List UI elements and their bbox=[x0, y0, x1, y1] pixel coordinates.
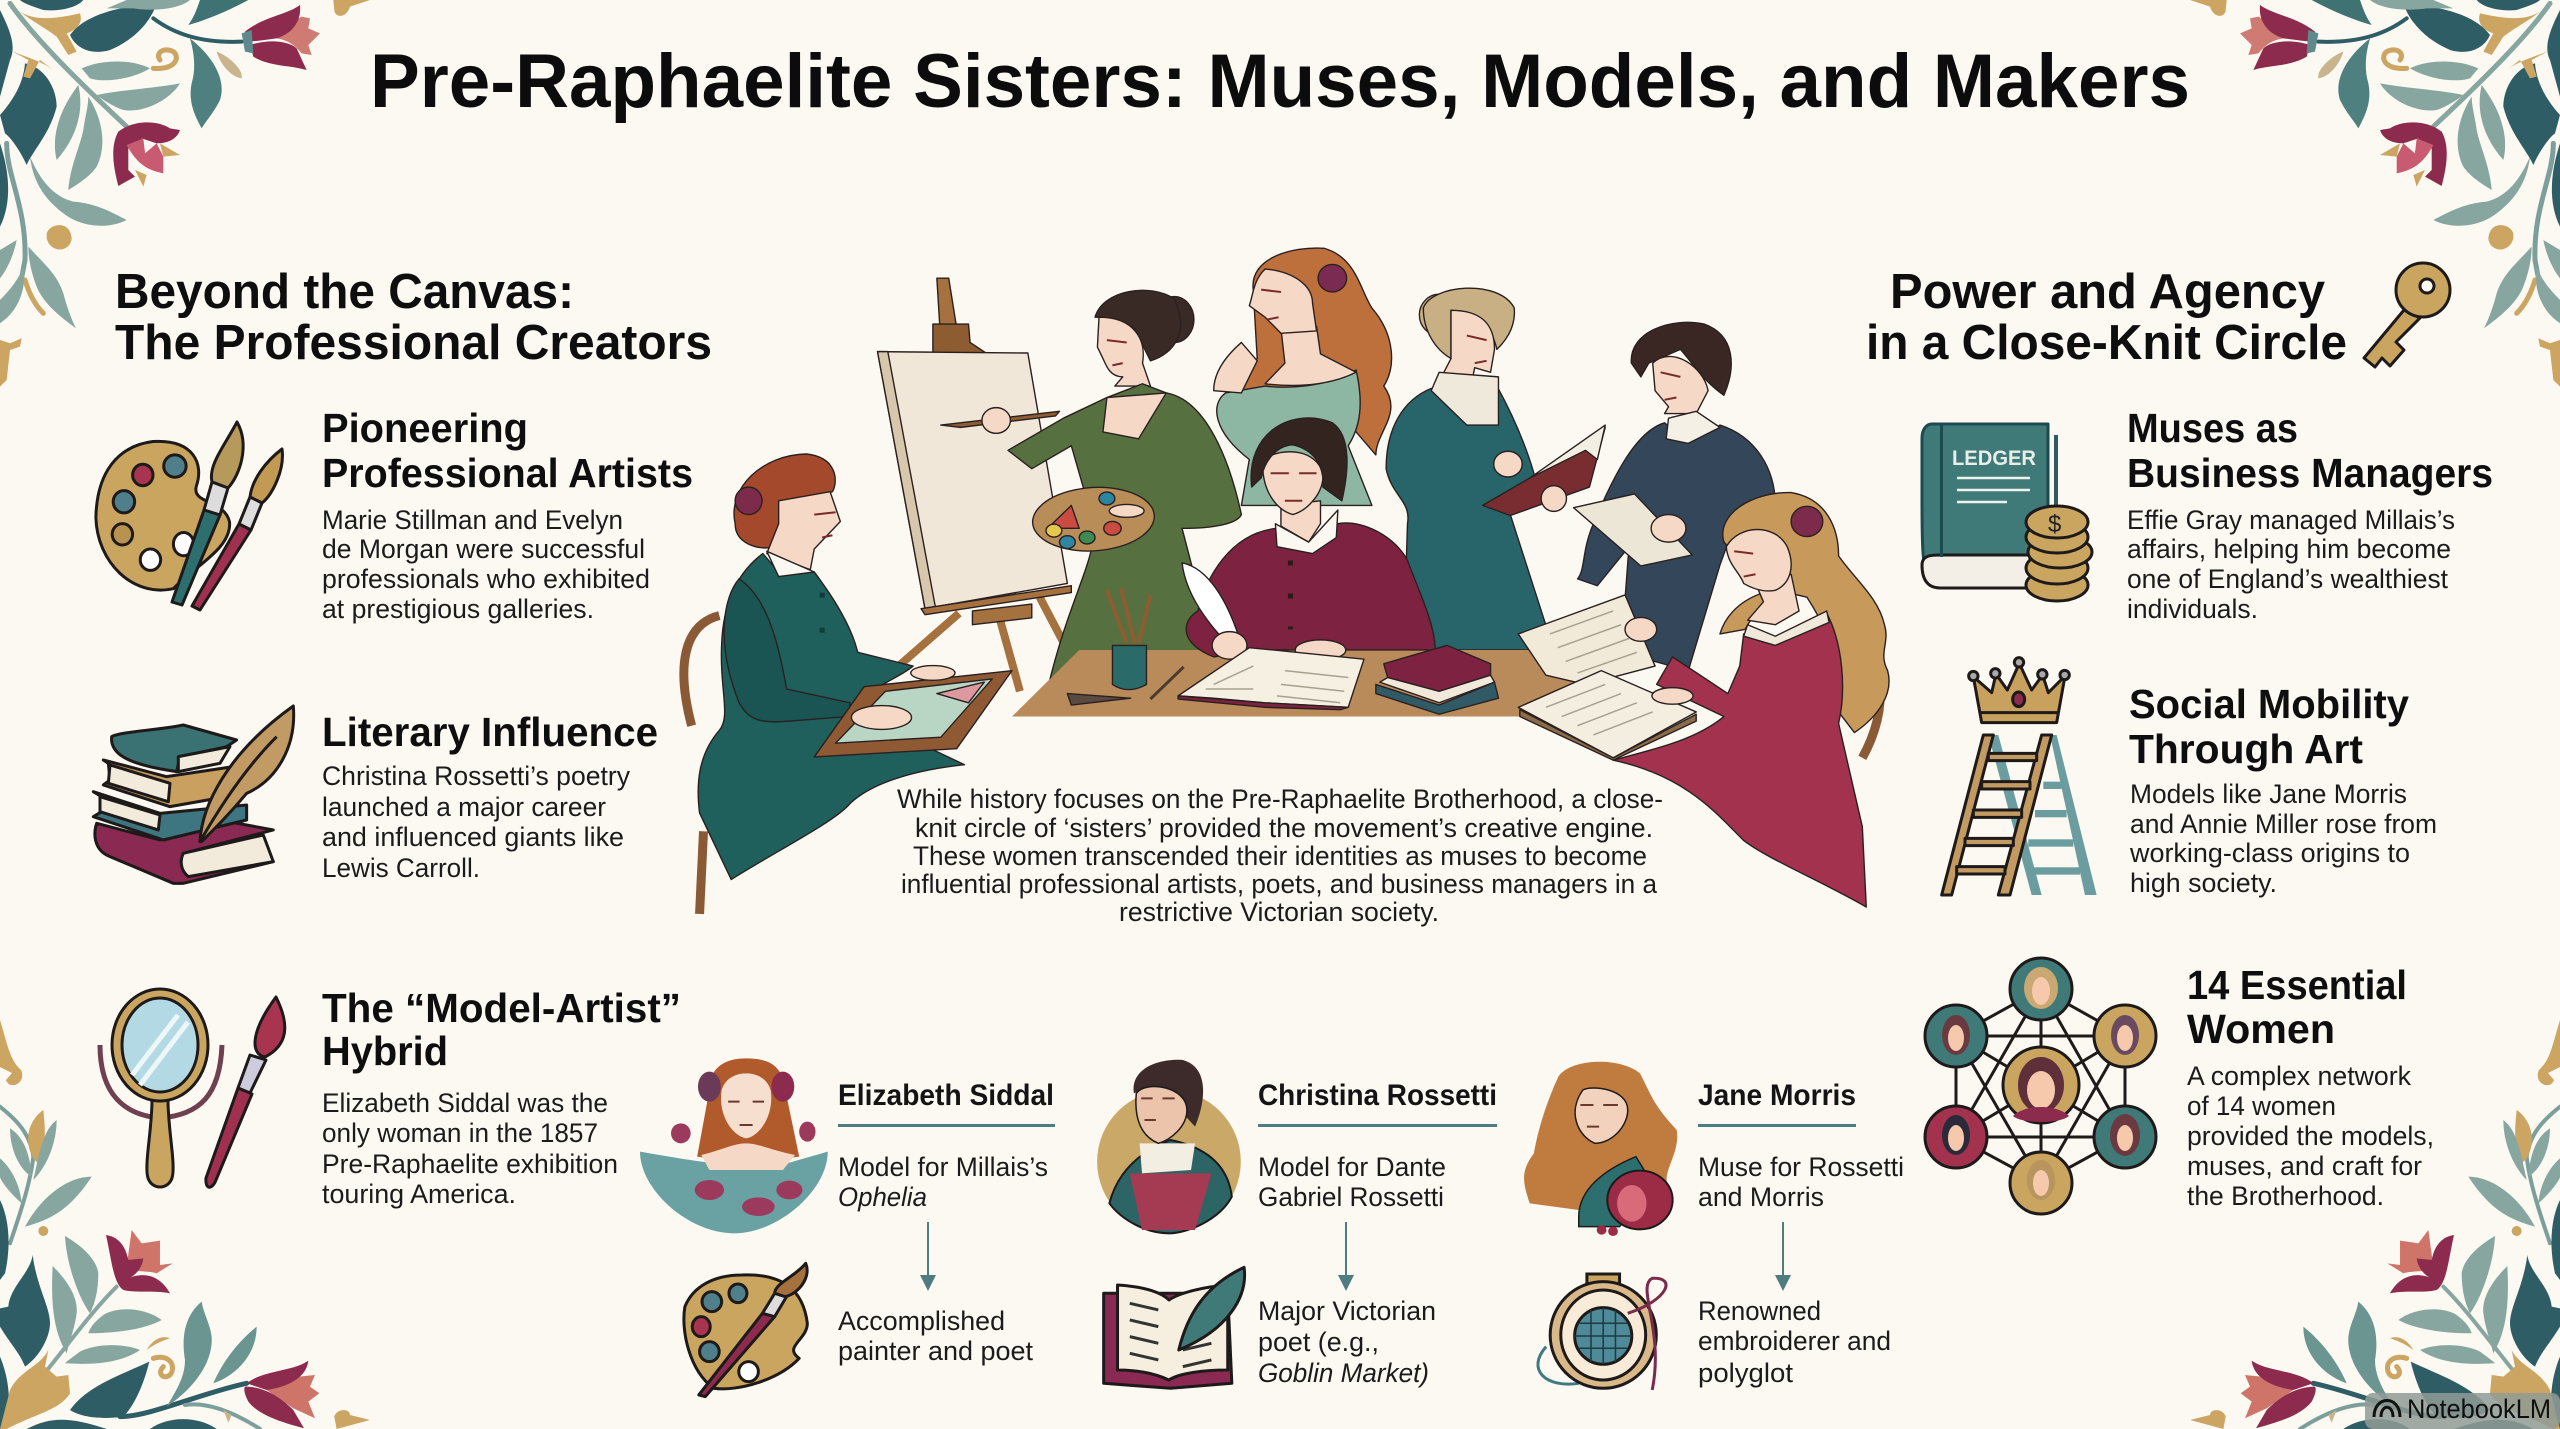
teal ladder behind bbox=[1988, 735, 2097, 895]
arrow: Morris bbox=[1775, 1222, 1791, 1291]
block: The Model-Artist Hybrid: Hybrid bbox=[322, 1028, 448, 1074]
text: Siddal outcome: Accomplished bbox=[838, 1306, 1005, 1336]
intro paragraph: influential professional artists, poets, and business managers in a bbox=[901, 869, 1658, 899]
icon: ledger and coins: LEDGER bbox=[1952, 447, 2036, 470]
text: Christina Rossetti: Christina Rossetti bbox=[1258, 1079, 1497, 1112]
heading: left column: The Professional Creators bbox=[115, 316, 712, 370]
block: Literary Influence bbox=[322, 709, 658, 883]
title: Pre-Raphaelite Sisters: Muses, Models, and Makers bbox=[370, 39, 2190, 124]
block: Social Mobility Through Art: high society. bbox=[2130, 868, 2277, 898]
block: The Model-Artist Hybrid: The “Model-Artist” bbox=[322, 985, 681, 1031]
floral corner: bottom left bbox=[0, 1020, 370, 1429]
heading: right column: in a Close-Knit Circle bbox=[1866, 316, 2347, 370]
text: Rossetti outcome bbox=[1258, 1296, 1436, 1388]
block: Pioneering Professional Artists: de Morgan were successful bbox=[322, 534, 645, 564]
text: Jane Morris: Muse for Rossetti bbox=[1698, 1152, 1904, 1182]
watermark: NotebookLM: NotebookLM bbox=[2407, 1394, 2551, 1424]
table bbox=[1012, 650, 1688, 717]
icon: ledger and coins: $ bbox=[2048, 511, 2061, 538]
block: Pioneering Professional Artists bbox=[322, 405, 693, 624]
woman painting in green dress bbox=[941, 290, 1241, 689]
block: Pioneering Professional Artists: at prestigious galleries. bbox=[322, 594, 594, 624]
text: Rossetti outcome: poet (e.g., bbox=[1258, 1327, 1379, 1357]
back woman with auburn hair and mint dress bbox=[1214, 248, 1392, 505]
arrow: Siddal bbox=[920, 1222, 936, 1291]
block: 14 Essential Women: the Brotherhood. bbox=[2187, 1181, 2384, 1211]
intro paragraph: knit circle of ‘sisters’ provided the movement’s creative engine. bbox=[915, 813, 1653, 843]
block: 14 Essential Women: Women bbox=[2187, 1006, 2335, 1052]
brown ladder and crown bbox=[1942, 658, 2069, 895]
block: 14 Essential Women: 14 Essential bbox=[2187, 962, 2407, 1008]
intro paragraph: restrictive Victorian society. bbox=[1119, 897, 1439, 927]
center woman in burgundy writing with quill bbox=[1182, 418, 1435, 660]
icon: ledger and coins bbox=[1922, 424, 2092, 601]
central illustration: seven women at a table bbox=[684, 248, 1889, 914]
text: Morris outcome: polyglot bbox=[1698, 1358, 1793, 1388]
seated woman right with long blonde hair bbox=[1613, 493, 1889, 907]
block: Literary Influence: Lewis Carroll. bbox=[322, 853, 480, 883]
portrait: Christina Rossetti bbox=[1097, 1060, 1241, 1233]
text: Jane Morris bbox=[1698, 1079, 1904, 1212]
text: Elizabeth Siddal: Ophelia bbox=[838, 1182, 927, 1212]
table items: inkwell, brushes, books bbox=[1067, 588, 1498, 714]
block: Muses as Business Managers: individuals. bbox=[2127, 594, 2258, 624]
text: Morris outcome: embroiderer and bbox=[1698, 1326, 1891, 1356]
intro paragraph: These women transcended their identities as muses to become bbox=[913, 841, 1647, 871]
woman writing with blonde hair and teal dress bbox=[1386, 288, 1605, 650]
block: Pioneering Professional Artists: Pioneering bbox=[322, 405, 528, 451]
text: Jane Morris: and Morris bbox=[1698, 1182, 1824, 1212]
block: Muses as Business Managers bbox=[2127, 405, 2493, 624]
easel and canvas bbox=[878, 278, 1071, 691]
text: Elizabeth Siddal bbox=[838, 1079, 1055, 1212]
block: Literary Influence: and influenced giants like bbox=[322, 822, 624, 852]
block: Literary Influence: Christina Rossetti’s poetry bbox=[322, 761, 630, 791]
heading: left column: Beyond the Canvas: bbox=[115, 265, 574, 319]
block: The Model-Artist Hybrid: only woman in the 1857 bbox=[322, 1118, 598, 1148]
text: Elizabeth Siddal: Elizabeth Siddal bbox=[838, 1079, 1054, 1112]
icon: mirror and brush bbox=[100, 989, 285, 1187]
block: Social Mobility Through Art bbox=[2129, 681, 2437, 898]
block: Muses as Business Managers: Business Managers bbox=[2127, 450, 2493, 496]
text: Christina Rossetti: Gabriel Rossetti bbox=[1258, 1182, 1444, 1212]
block: The Model-Artist Hybrid: Pre-Raphaelite exhibition bbox=[322, 1149, 618, 1179]
block: Pioneering Professional Artists: professionals who exhibited bbox=[322, 564, 650, 594]
block: 14 Essential Women: provided the models, bbox=[2187, 1121, 2434, 1151]
block: Literary Influence: Literary Influence bbox=[322, 709, 658, 755]
text: Siddal outcome bbox=[838, 1306, 1033, 1366]
block: 14 Essential Women bbox=[2187, 962, 2434, 1211]
arrow: Rossetti bbox=[1338, 1222, 1354, 1291]
heading: right column: Power and Agency bbox=[1890, 265, 2325, 319]
block: 14 Essential Women: of 14 women bbox=[2187, 1091, 2336, 1121]
text: Elizabeth Siddal: Model for Millais’s bbox=[838, 1152, 1048, 1182]
block: 14 Essential Women: A complex network bbox=[2187, 1061, 2411, 1091]
block: The Model-Artist Hybrid: Elizabeth Siddal was the bbox=[322, 1088, 608, 1118]
icon: palette and brushes bbox=[96, 422, 282, 610]
icon: embroidery hoop bbox=[1538, 1274, 1666, 1390]
block: Social Mobility Through Art: Through Art bbox=[2129, 726, 2363, 772]
floral corner: top right bbox=[2190, 0, 2560, 387]
icon: books and feather bbox=[93, 706, 294, 883]
portrait: Elizabeth Siddal bbox=[640, 1058, 828, 1233]
intro paragraph: While history focuses on the Pre-Raphaelite Brotherhood, a close- bbox=[897, 784, 1663, 814]
text: Rossetti outcome: Goblin Market) bbox=[1258, 1358, 1429, 1388]
block: The Model-Artist Hybrid: touring America. bbox=[322, 1179, 516, 1209]
icon: crown and ladder bbox=[1942, 658, 2097, 895]
text: Rossetti outcome: Major Victorian bbox=[1258, 1296, 1436, 1326]
portrait: Jane Morris bbox=[1524, 1062, 1677, 1236]
block: Social Mobility Through Art: and Annie Miller rose from bbox=[2130, 809, 2437, 839]
block: Literary Influence: launched a major career bbox=[322, 792, 606, 822]
icon: open book and quill bbox=[1104, 1267, 1245, 1388]
text: Jane Morris: Jane Morris bbox=[1698, 1079, 1856, 1112]
seated woman left in teal dress bbox=[684, 454, 1012, 914]
heading: left column bbox=[115, 265, 712, 370]
block: Social Mobility Through Art: Models like Jane Morris bbox=[2130, 779, 2407, 809]
heading: right column bbox=[1866, 265, 2347, 370]
text: Morris outcome bbox=[1698, 1296, 1891, 1388]
text: Christina Rossetti: Model for Dante bbox=[1258, 1152, 1446, 1182]
large open books at right bbox=[1518, 595, 1696, 760]
floral corner: bottom right bbox=[2190, 1020, 2560, 1429]
block: The Model-Artist Hybrid bbox=[322, 985, 681, 1209]
block: Social Mobility Through Art: Social Mobility bbox=[2129, 681, 2409, 727]
text: Morris outcome: Renowned bbox=[1698, 1296, 1821, 1326]
woman with paper in dark slate dress bbox=[1574, 322, 1775, 671]
block: Muses as Business Managers: one of England’s wealthiest bbox=[2127, 564, 2448, 594]
floral corner: top left bbox=[0, 0, 370, 387]
block: Social Mobility Through Art: working-class origins to bbox=[2129, 838, 2410, 868]
block: Muses as Business Managers: affairs, helping him become bbox=[2127, 534, 2451, 564]
watermark: NotebookLM bbox=[2365, 1393, 2560, 1429]
block: Pioneering Professional Artists: Professional Artists bbox=[322, 450, 693, 496]
icon: network of women bbox=[1925, 958, 2156, 1214]
block: Muses as Business Managers: Effie Gray managed Millais’s bbox=[2127, 505, 2455, 535]
icon: palette and brush bbox=[684, 1263, 807, 1397]
block: Muses as Business Managers: Muses as bbox=[2127, 405, 2298, 451]
block: 14 Essential Women: muses, and craft for bbox=[2187, 1151, 2422, 1181]
icon: key bbox=[2364, 263, 2450, 367]
block: Pioneering Professional Artists: Marie Stillman and Evelyn bbox=[322, 505, 623, 535]
text: Siddal outcome: painter and poet bbox=[838, 1336, 1033, 1366]
text: Christina Rossetti bbox=[1258, 1079, 1497, 1212]
intro paragraph bbox=[897, 784, 1663, 927]
